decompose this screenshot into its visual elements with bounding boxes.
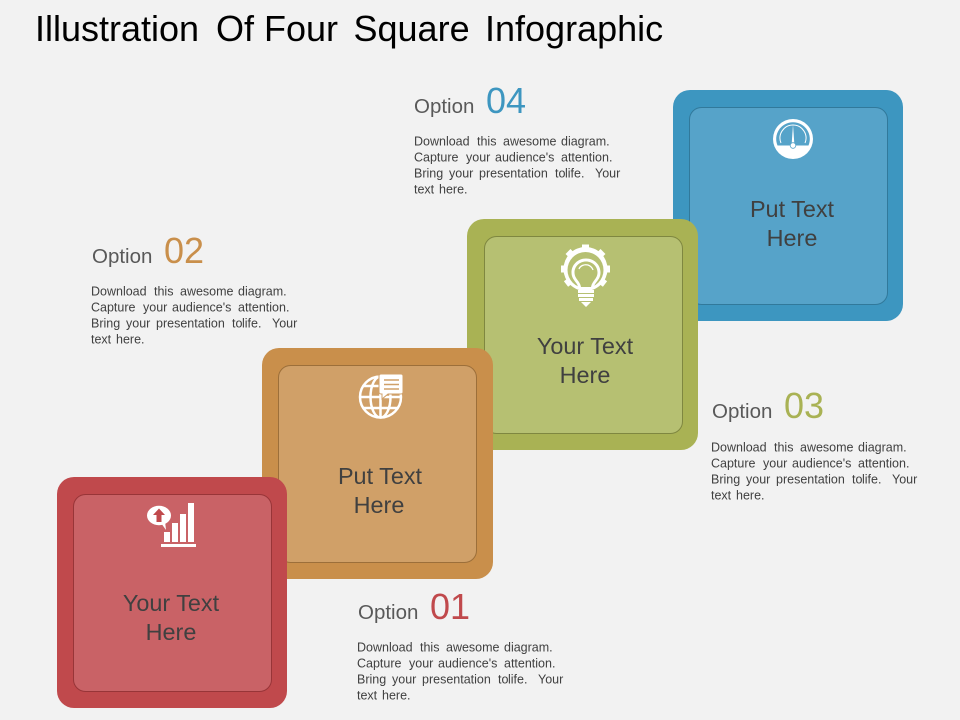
- text block: option 04: here.: [439, 182, 468, 196]
- label: square 02 text: Put Text: [338, 463, 422, 489]
- text block: option 03: here.: [736, 488, 764, 502]
- text block: option 04: your: [449, 166, 473, 180]
- text block: option 04: text: [414, 182, 435, 196]
- text block: option 03: Your: [892, 472, 917, 486]
- text block: option 02: Download: [91, 284, 147, 298]
- icon: lightbulb gear: [561, 244, 610, 307]
- label: square 02 text: Here: [354, 492, 404, 518]
- text block: option 03: attention.: [858, 456, 909, 470]
- text block: option 04: 04: [486, 80, 526, 121]
- title: Four: [264, 8, 338, 49]
- text block: option 03: awesome: [800, 440, 854, 454]
- label: square 04 text: Here: [767, 225, 817, 251]
- text block: option 04: Option: [414, 95, 474, 118]
- text block: option 01: attention.: [504, 656, 555, 670]
- text block: option 02: diagram.: [238, 284, 287, 298]
- text block: option 02: audience's: [172, 300, 231, 314]
- text block: option 04: attention.: [561, 150, 612, 164]
- text block: option 04: Your: [595, 166, 620, 180]
- text block: option 03: [711, 385, 917, 502]
- text block: option 04: life.: [565, 166, 584, 180]
- text block: option 01: here.: [382, 688, 410, 702]
- text block: option 02: this: [154, 284, 173, 298]
- text block: option 04: this: [477, 134, 496, 148]
- text block: option 02: [91, 230, 297, 346]
- text block: option 04: your: [466, 150, 490, 164]
- label: square 01 text: Here: [146, 619, 196, 645]
- text block: option 03: presentation: [776, 472, 845, 486]
- text block: option 03: audience's: [792, 456, 851, 470]
- label: square 03 text: Your Text: [537, 333, 633, 359]
- text block: option 02: here.: [116, 332, 144, 346]
- text block: option 03: Capture: [711, 456, 756, 470]
- panel: square 02: [262, 348, 493, 579]
- text block: option 03: Option: [712, 400, 772, 423]
- title: Square: [354, 8, 470, 49]
- text block: option 04: Download: [414, 134, 470, 148]
- text block: option 01: audience's: [438, 656, 497, 670]
- text block: option 02: your: [143, 300, 167, 314]
- text block: option 04: Capture: [414, 150, 459, 164]
- panel: square 03: [467, 219, 698, 450]
- text block: option 04: presentation: [479, 166, 548, 180]
- text block: option 03: Bring: [711, 472, 740, 486]
- text block: option 02: text: [91, 332, 112, 346]
- text block: option 01: diagram.: [504, 640, 553, 654]
- text block: option 03: text: [711, 488, 732, 502]
- text block: option 03: 03: [784, 385, 824, 426]
- text block: option 02: presentation: [156, 316, 225, 330]
- text block: option 01: Download: [357, 640, 413, 654]
- text block: option 03: diagram.: [858, 440, 907, 454]
- text block: option 01: your: [392, 672, 416, 686]
- text block: option 01: life.: [508, 672, 527, 686]
- title: Infographic: [485, 8, 663, 49]
- text block: option 02: attention.: [238, 300, 289, 314]
- text block: option 01: 01: [430, 586, 470, 627]
- text block: option 01: Bring: [357, 672, 386, 686]
- icon: bar chart with arrow bubble: [147, 503, 196, 547]
- text block: option 02: to: [232, 316, 242, 330]
- text block: option 01: text: [357, 688, 378, 702]
- text block: option 01: Your: [538, 672, 563, 686]
- text block: option 01: this: [420, 640, 439, 654]
- label: square 01 text: Your Text: [123, 590, 219, 616]
- text block: option 01: Capture: [357, 656, 402, 670]
- text block: option 01: Option: [358, 601, 418, 624]
- text block: option 02: Bring: [91, 316, 120, 330]
- text block: option 04: Bring: [414, 166, 443, 180]
- text block: option 02: awesome: [180, 284, 234, 298]
- text block: option 01: your: [409, 656, 433, 670]
- text block: option 02: Your: [272, 316, 297, 330]
- title: Of: [216, 8, 255, 49]
- text block: option 04: audience's: [495, 150, 554, 164]
- text block: option 01: to: [498, 672, 508, 686]
- panel: square 01: [57, 477, 287, 708]
- text block: option 03: your: [746, 472, 770, 486]
- text block: option 02: your: [126, 316, 150, 330]
- text block: option 01: presentation: [422, 672, 491, 686]
- text block: option 04: awesome: [503, 134, 557, 148]
- text block: option 03: this: [774, 440, 793, 454]
- icon: globe with speech bubble: [360, 374, 403, 418]
- text block: option 02: Option: [92, 245, 152, 268]
- text block: option 02: Capture: [91, 300, 136, 314]
- text block: option 02: life.: [242, 316, 261, 330]
- label: square 03 text: Here: [560, 362, 610, 388]
- text block: option 03: life.: [862, 472, 881, 486]
- text block: option 04: [414, 80, 620, 196]
- title: Illustration: [35, 8, 199, 49]
- text block: option 01: awesome: [446, 640, 500, 654]
- text block: option 03: your: [763, 456, 787, 470]
- text block: option 01: [357, 586, 563, 702]
- panel: square 04: [673, 90, 903, 321]
- label: square 04 text: Put Text: [750, 196, 834, 222]
- text block: option 04: diagram.: [561, 134, 610, 148]
- icon: gauge: [773, 119, 813, 159]
- text block: option 02: 02: [164, 230, 204, 271]
- text block: option 03: Download: [711, 440, 767, 454]
- text block: option 03: to: [852, 472, 862, 486]
- text block: option 04: to: [555, 166, 565, 180]
